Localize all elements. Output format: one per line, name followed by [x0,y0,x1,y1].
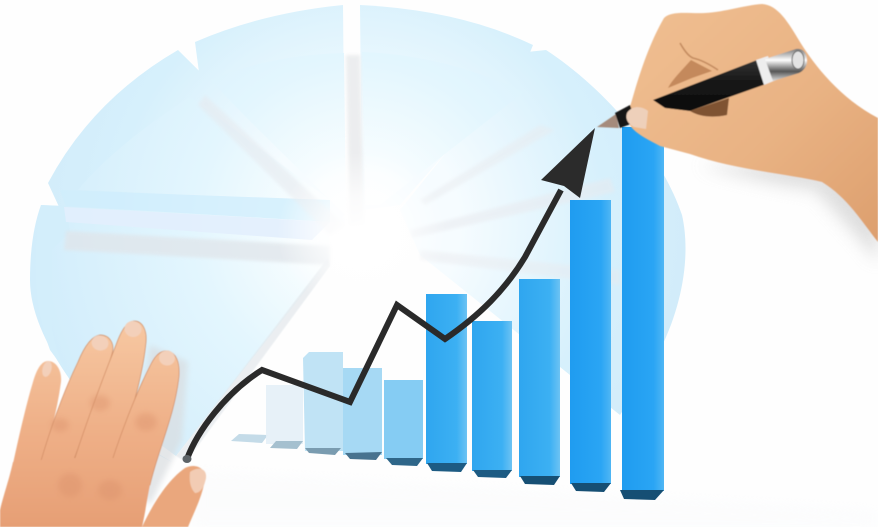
bar 9 [570,200,611,492]
bar 8 [519,279,560,485]
ring finger [36,335,113,478]
slice: upper left [48,50,345,222]
pie side shadow [64,231,330,265]
bar 6 [426,294,467,472]
hand: right holding pen [597,4,878,262]
slice: lower left [30,205,330,456]
arrow end cap [182,455,192,463]
hand back [0,458,156,527]
floor reflection [190,470,878,527]
center glow [277,152,447,312]
pen cap [756,49,807,85]
bar 3 [303,352,343,455]
slice: top left [195,5,345,225]
slice: top right [360,5,533,210]
slice: right [400,50,686,415]
finger fold [668,60,712,88]
bar 4 [343,368,382,460]
thumb nail [190,469,206,493]
shadow under pen [690,98,729,117]
bar 5 [384,380,423,466]
bar 10 [620,127,664,500]
index finger [106,351,179,485]
slice: lower left stripe [176,258,330,462]
bar 1 [231,434,268,443]
hand shadow [130,345,188,505]
arrow tip [541,128,595,198]
finger crease [680,43,718,70]
pen [597,49,807,128]
thumb [142,466,205,527]
hand palm [627,4,878,242]
knuckles [51,395,157,500]
bar chart [231,127,664,500]
hand: left on chart [0,320,206,527]
bar 2 [266,385,303,449]
bar 7 [472,321,512,478]
slice: divider strips on the right [420,125,555,205]
hand shadow [700,165,878,262]
pie chart [30,5,686,462]
thumb nail [626,107,648,129]
little finger [10,361,61,478]
fingernails [41,320,176,378]
arrow [182,128,595,463]
middle finger [68,321,146,480]
